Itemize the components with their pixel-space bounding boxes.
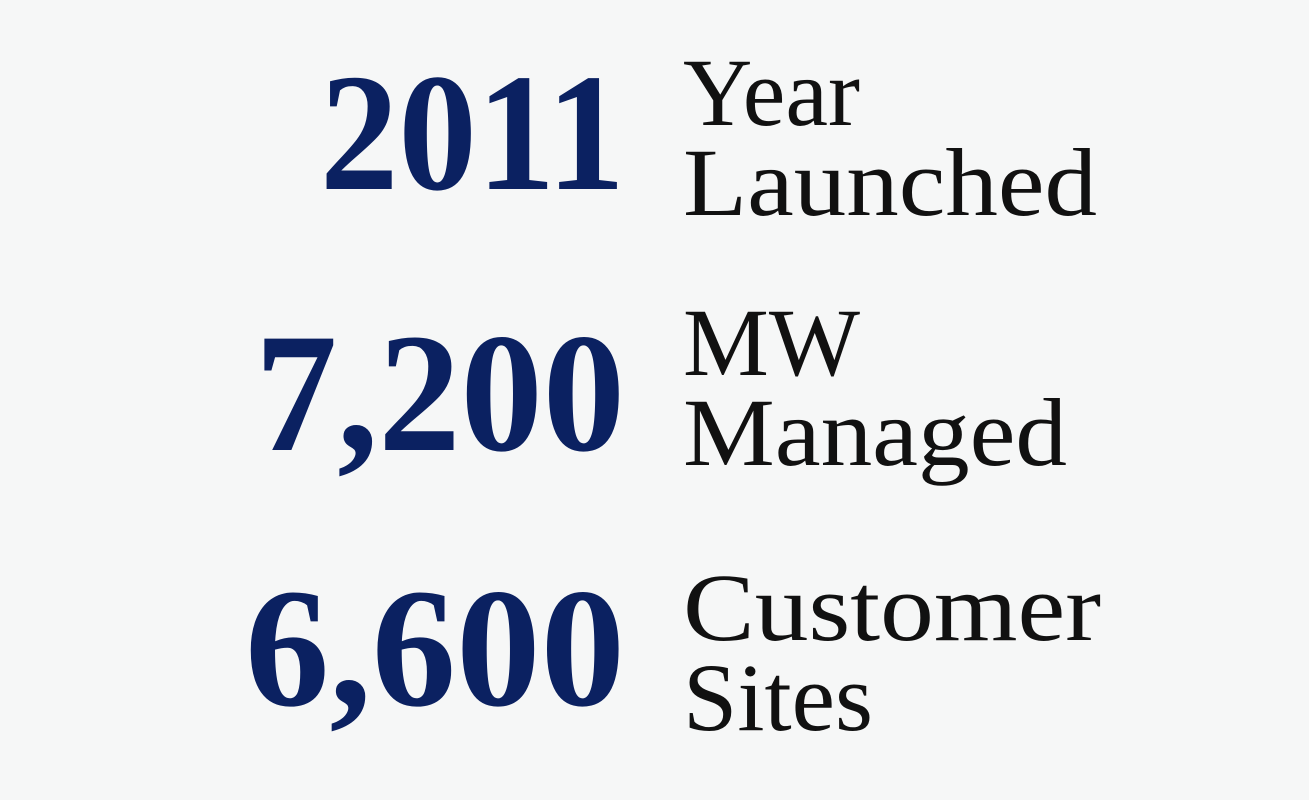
number: 6,600: 6,600 bbox=[245, 554, 625, 742]
label: Customer Sites bbox=[683, 554, 1101, 751]
label: Year Launched: Year bbox=[683, 39, 860, 146]
label: Year Launched bbox=[683, 39, 1097, 236]
stat: MW managed bbox=[255, 289, 1067, 487]
label: Year Launched: Launched bbox=[683, 129, 1097, 236]
label: Customer Sites: Customer bbox=[683, 554, 1101, 661]
label: MW Managed: Managed bbox=[683, 379, 1067, 486]
label: Customer Sites: Sites bbox=[683, 644, 873, 751]
label: MW Managed: MW bbox=[683, 289, 860, 396]
stat: year launched bbox=[320, 39, 1097, 236]
number: 7,200: 7,200 bbox=[255, 299, 625, 487]
number: 2011: 2011 bbox=[320, 40, 625, 226]
stat: customer sites bbox=[245, 554, 1101, 751]
label: MW Managed bbox=[683, 289, 1067, 486]
